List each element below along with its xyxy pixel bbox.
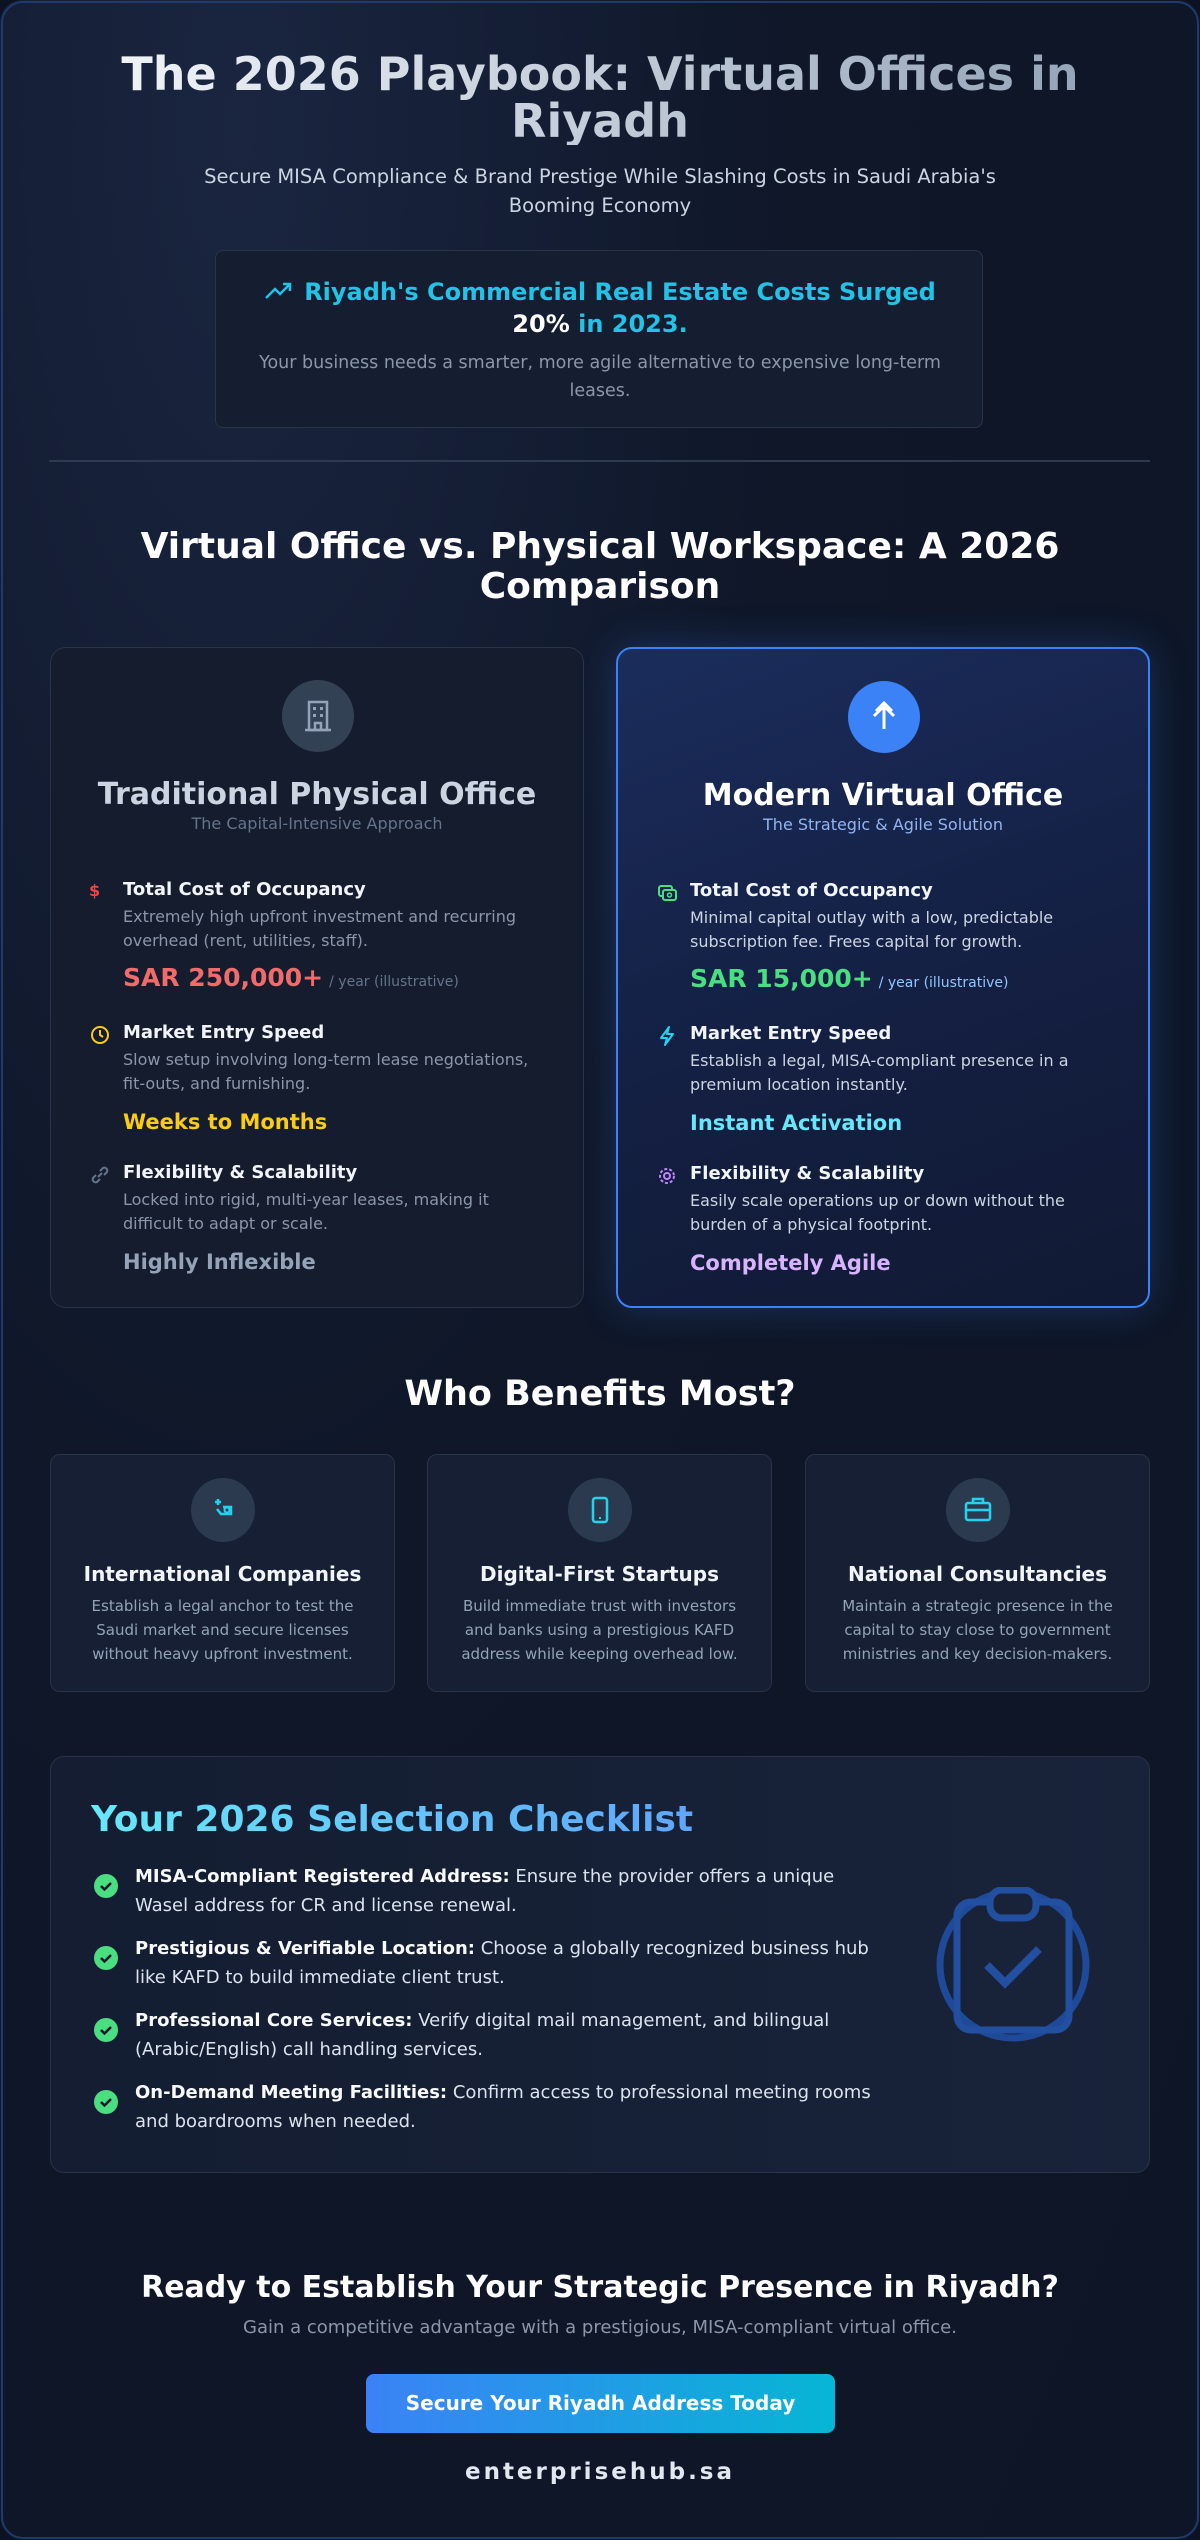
panel: virtual office: Minimal capital outlay with a low, predictable subscription fee. Frees capital for growth. <box>690 908 1053 951</box>
panel: international companies <box>50 1454 395 1692</box>
panel: traditional office: Market Entry Speed <box>123 1022 324 1043</box>
subheading: The Strategic & Agile Solution <box>763 815 1003 834</box>
benefits heading: Who Benefits Most? <box>404 1374 796 1414</box>
subtitle: Secure MISA Compliance & Brand Prestige While Slashing Costs in Saudi Arabia's Booming Economy <box>204 165 996 217</box>
title: The 2026 Playbook: Virtual Offices in Riyadh <box>121 47 1079 148</box>
item: cost <box>658 880 1053 993</box>
CTA subtext: Gain a competitive advantage with a prestigious, MISA-compliant virtual office. <box>243 2317 957 2338</box>
panel: traditional office: Extremely high upfront investment and recurring overhead (rent, utilities, staff). <box>123 907 516 950</box>
icon: clock <box>91 1026 109 1044</box>
heading: Modern Virtual Office <box>703 778 1063 813</box>
icon: phone <box>568 1478 632 1542</box>
domain: enterprisehub.sa <box>465 2459 735 2485</box>
panel: traditional office: SAR 250,000+ / year (illustrative) <box>123 963 459 992</box>
CTA button <box>366 2374 835 2433</box>
panel: traditional office: Flexibility & Scalability <box>123 1162 357 1183</box>
item: speed <box>660 1023 1069 1135</box>
panel: checklist: MISA-Compliant Registered Address: Ensure the provider offers a unique Wasel address for CR and license renewal. <box>135 1866 834 1916</box>
stat headline: Riyadh's Commercial Real Estate Costs Surged 20% in 2023. <box>304 278 936 338</box>
check item 2 <box>94 1938 869 1988</box>
CTA button: Secure Your Riyadh Address Today <box>406 2391 795 2415</box>
icon: lightning <box>660 1026 674 1046</box>
panel: checklist: Prestigious & Verifiable Location: Choose a globally recognized business hub like KAFD to build immediate client trust. <box>135 1938 869 1988</box>
stat callout <box>215 250 983 428</box>
item: flexibility <box>659 1163 1065 1275</box>
panel: virtual office: Establish a legal, MISA-compliant presence in a premium location instantly. <box>690 1051 1069 1094</box>
icon: arrow up <box>848 681 920 753</box>
panel: virtual office: Instant Activation <box>690 1111 902 1135</box>
panel: traditional office: Weeks to Months <box>123 1110 327 1134</box>
panel: consultancies: Maintain a strategic presence in the capital to stay close to government ministries and key decision-makers. <box>842 1597 1113 1663</box>
panel: international companies: Establish a legal anchor to test the Saudi market and secure licenses without heavy upfront investment. <box>92 1597 353 1663</box>
panel: virtual office <box>616 647 1150 1308</box>
panel: startups <box>427 1454 772 1692</box>
icon: building <box>282 680 354 752</box>
panel: virtual office: SAR 15,000+ / year (illustrative) <box>690 964 1008 993</box>
panel: traditional office <box>50 647 584 1308</box>
panel: virtual office: Completely Agile <box>690 1251 891 1275</box>
panel: consultancies: National Consultancies <box>848 1562 1107 1586</box>
panel: virtual office: Total Cost of Occupancy <box>690 880 933 901</box>
icon: clipboard <box>936 1887 1090 2042</box>
panel: startups: Digital-First Startups <box>480 1562 719 1586</box>
icon: money <box>658 885 677 901</box>
panel: virtual office: Market Entry Speed <box>690 1023 891 1044</box>
checklist heading: Your 2026 Selection Checklist <box>91 1799 693 1840</box>
panel: checklist: On-Demand Meeting Facilities: Confirm access to professional meeting rooms and boardrooms when needed. <box>135 2082 871 2132</box>
icon: briefcase <box>946 1478 1010 1542</box>
panel: consultancies <box>805 1454 1150 1692</box>
panel: traditional office: Total Cost of Occupancy <box>123 879 366 900</box>
icon: globe <box>190 1478 254 1542</box>
heading: Traditional Physical Office <box>98 777 536 812</box>
panel: virtual office: Easily scale operations up or down without the burden of a physical footprint. <box>690 1191 1065 1234</box>
icon: gear <box>659 1168 675 1184</box>
CTA heading: Ready to Establish Your Strategic Presence in Riyadh? <box>141 2270 1059 2305</box>
panel: international companies: International Companies <box>84 1562 361 1586</box>
panel: traditional office: Locked into rigid, multi-year leases, making it difficult to adapt or scale. <box>123 1190 489 1233</box>
check item 1 <box>94 1866 834 1916</box>
panel: checklist <box>50 1756 1150 2173</box>
item: flexibility <box>92 1162 489 1274</box>
panel: virtual office: Flexibility & Scalability <box>690 1163 924 1184</box>
stat text: Your business needs a smarter, more agile alternative to expensive long-term leases. <box>259 353 941 401</box>
check item 3 <box>94 2010 829 2060</box>
item: cost <box>89 879 516 992</box>
item: speed <box>91 1022 528 1134</box>
check item 4 <box>94 2082 871 2132</box>
icon: dollar: $ <box>89 881 100 900</box>
icon: link <box>92 1166 108 1184</box>
comparison heading: Virtual Office vs. Physical Workspace: A 2026 Comparison <box>141 526 1059 607</box>
panel: checklist: Professional Core Services: Verify digital mail management, and bilingual (Arabic/English) call handling services. <box>135 2010 829 2060</box>
panel: traditional office: Highly Inflexible <box>123 1250 316 1274</box>
panel: traditional office: Slow setup involving long-term lease negotiations, fit-outs, and furnishing. <box>123 1050 528 1093</box>
subheading: The Capital-Intensive Approach <box>191 814 443 833</box>
panel: startups: Build immediate trust with investors and banks using a prestigious KAFD address while keeping overhead low. <box>461 1597 738 1663</box>
